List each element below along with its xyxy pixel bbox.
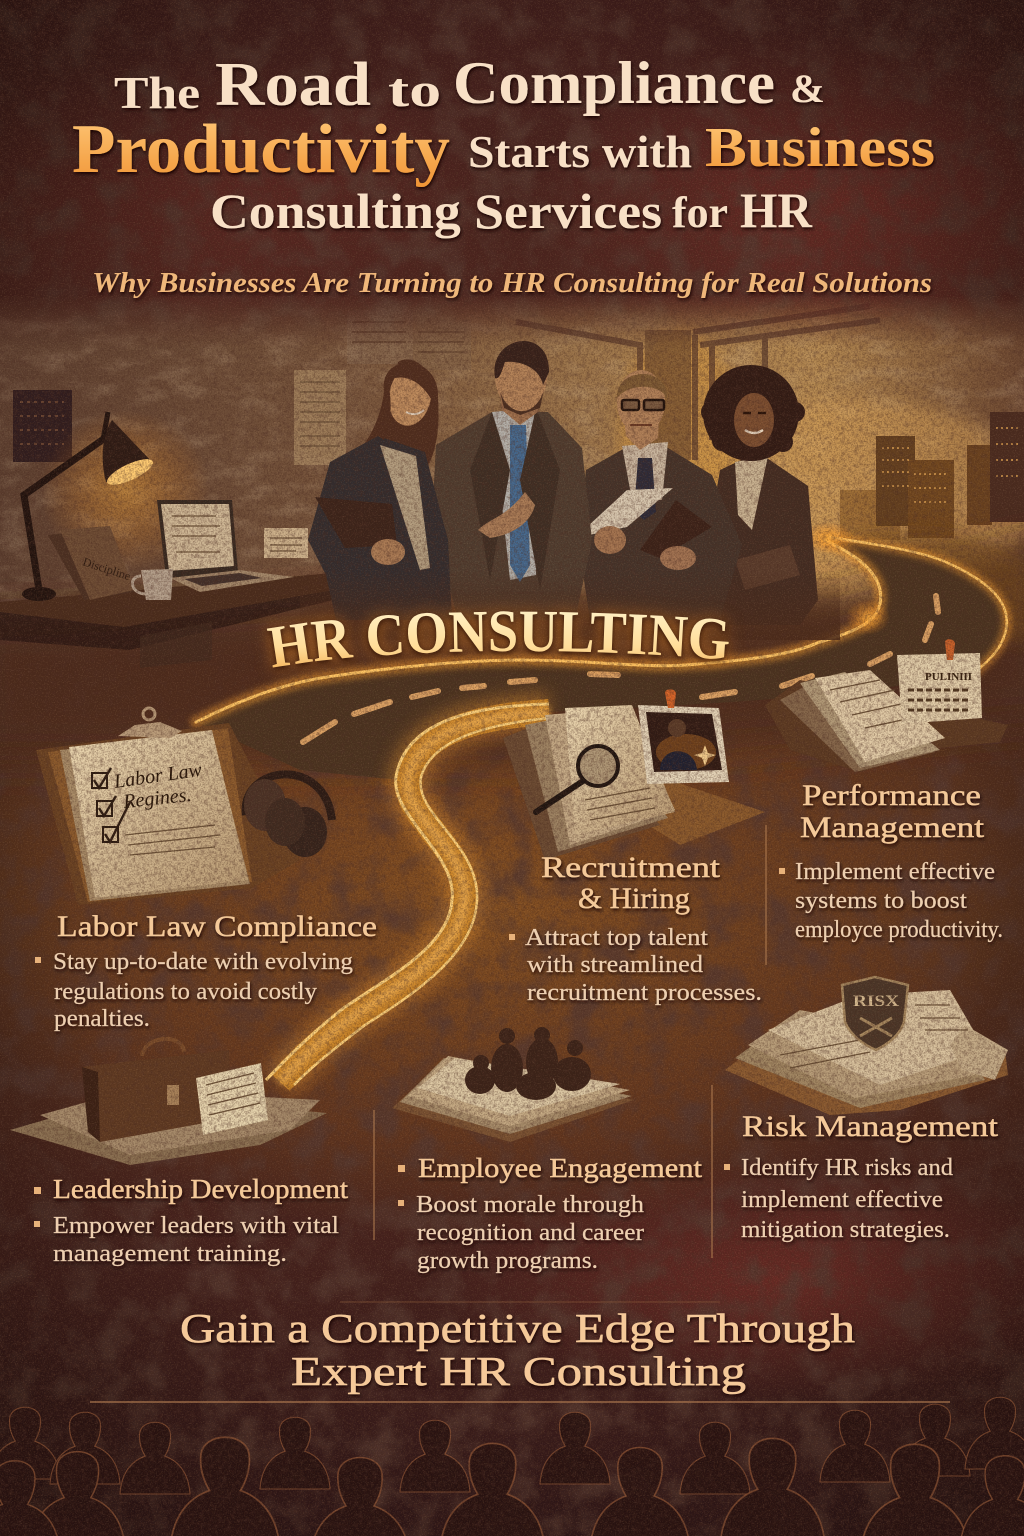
icon: employee engagement figurines on papers [392, 1027, 634, 1142]
panel: labor law compliance: penalties. [54, 1006, 150, 1032]
desk and lamp [0, 410, 333, 668]
title line 2: Productivity [72, 111, 450, 188]
panel: leadership development [34, 1174, 349, 1267]
title line 1 [114, 50, 825, 119]
pin [945, 639, 955, 660]
panel: employee engagement [398, 1153, 703, 1274]
window frames [516, 306, 880, 460]
icon: briefcase and papers [10, 1039, 327, 1165]
panel: employee engagement: Boost morale through [416, 1192, 644, 1218]
photograph [638, 705, 729, 784]
title line 1: Compliance [453, 50, 775, 116]
title line 3: Consulting Services [210, 183, 662, 239]
title line 3: HR [740, 182, 813, 238]
consultant 1: woman left [308, 359, 452, 620]
folder [640, 500, 712, 570]
title line 3 [210, 182, 813, 239]
audience silhouettes [0, 1397, 1024, 1536]
icon: performance documents and calendar [765, 639, 1008, 772]
desk lamp [22, 412, 156, 601]
books [48, 526, 134, 600]
title line 1: The [114, 67, 200, 118]
panel: leadership development: Empower leaders with vital [53, 1213, 339, 1239]
books: Discipline [81, 555, 132, 583]
fade under people [300, 570, 840, 640]
icon: headphones [244, 774, 332, 857]
title line 2: Business [705, 117, 935, 179]
panel: recruitment and hiring: Attract top talent [525, 925, 708, 951]
subtitle: Why Businesses Are Turning to HR Consulting for Real Solutions [92, 267, 932, 299]
icon: clipboard with labor law checklist: Labor Law [112, 759, 204, 793]
tablet [575, 488, 673, 554]
consultant 4: woman right [701, 365, 818, 625]
ground [0, 533, 1024, 760]
icon: recruitment documents and magnifier [503, 689, 765, 860]
desk [0, 573, 333, 668]
icon: clipboard with labor law checklist [36, 708, 332, 905]
title line 1: Road [215, 51, 371, 119]
panel: labor law compliance: regulations to avoid costly [54, 979, 317, 1005]
consultant 2: man centre [432, 341, 592, 620]
panel: recruitment and hiring: & Hiring [578, 882, 690, 915]
wall papers [347, 321, 471, 370]
title block [72, 50, 935, 299]
closing call to action: Expert HR Consulting [291, 1348, 746, 1394]
panel: leadership development: management training. [53, 1241, 287, 1267]
panel: risk management: implement effective [741, 1187, 943, 1213]
panel: risk management [724, 1110, 999, 1243]
shield [842, 977, 908, 1050]
panel: recruitment and hiring: Recruitment [541, 851, 721, 884]
pin [665, 689, 676, 708]
HR CONSULTING heading: HR CONSULTING [260, 602, 736, 677]
panel: labor law compliance: Stay up-to-date with evolving [53, 949, 353, 975]
mug [132, 569, 173, 600]
consultant 3: man with glasses [575, 370, 742, 620]
panel: leadership development: Leadership Development [53, 1174, 349, 1204]
panel: labor law compliance: Labor Law Compliance [57, 910, 377, 943]
city skyline left [13, 390, 72, 462]
closing call to action [90, 1302, 950, 1402]
briefcase [82, 1039, 232, 1142]
lamp glow [40, 410, 210, 570]
panel: risk management: mitigation strategies. [741, 1217, 950, 1243]
consultants [308, 341, 818, 625]
panel: employee engagement: recognition and career [417, 1220, 644, 1246]
title line 2 [72, 111, 935, 188]
panel: recruitment and hiring: with streamlined [527, 952, 703, 978]
document [196, 1063, 268, 1135]
closing call to action: Gain a Competitive Edge Through [180, 1305, 855, 1351]
panel: performance management: systems to boost [795, 888, 967, 914]
panel: employee engagement: Employee Engagement [418, 1153, 703, 1183]
panel: performance management [779, 779, 1003, 943]
calendar: PULINIII [925, 671, 972, 683]
title line 1: to [388, 64, 441, 117]
shield: RISX [853, 993, 900, 1010]
woman's folder [315, 497, 405, 565]
panel: labor law compliance [35, 910, 377, 1032]
glowing path [266, 704, 549, 1085]
panel: risk management: Identify HR risks and [741, 1155, 953, 1181]
panel: recruitment and hiring [509, 851, 762, 1006]
magnifier [536, 746, 618, 812]
laptop [157, 500, 294, 592]
road [196, 522, 1007, 780]
city skyline right [840, 412, 1024, 540]
glowing road edge upper [196, 537, 1007, 722]
icon: clipboard with labor law checklist: Regines. [121, 784, 192, 813]
panel: performance management: Management [800, 811, 985, 844]
road centre dashes [303, 596, 938, 742]
calendar [897, 653, 982, 724]
title line 2: Starts with [468, 126, 692, 177]
panel: risk management: Risk Management [742, 1110, 999, 1143]
panel: employee engagement: growth programs. [417, 1248, 598, 1274]
title line 3: for [672, 188, 728, 237]
panel: performance management: Implement effective [795, 859, 995, 885]
icon: risk shield and papers [725, 977, 1008, 1115]
small note [264, 528, 308, 558]
panel: recruitment and hiring: recruitment processes. [527, 980, 762, 1006]
title line 1: & [790, 66, 825, 111]
office scene backdrop [0, 300, 1024, 627]
panel: performance management: employce productivity. [795, 917, 1003, 943]
panel: performance management: Performance [802, 779, 981, 812]
